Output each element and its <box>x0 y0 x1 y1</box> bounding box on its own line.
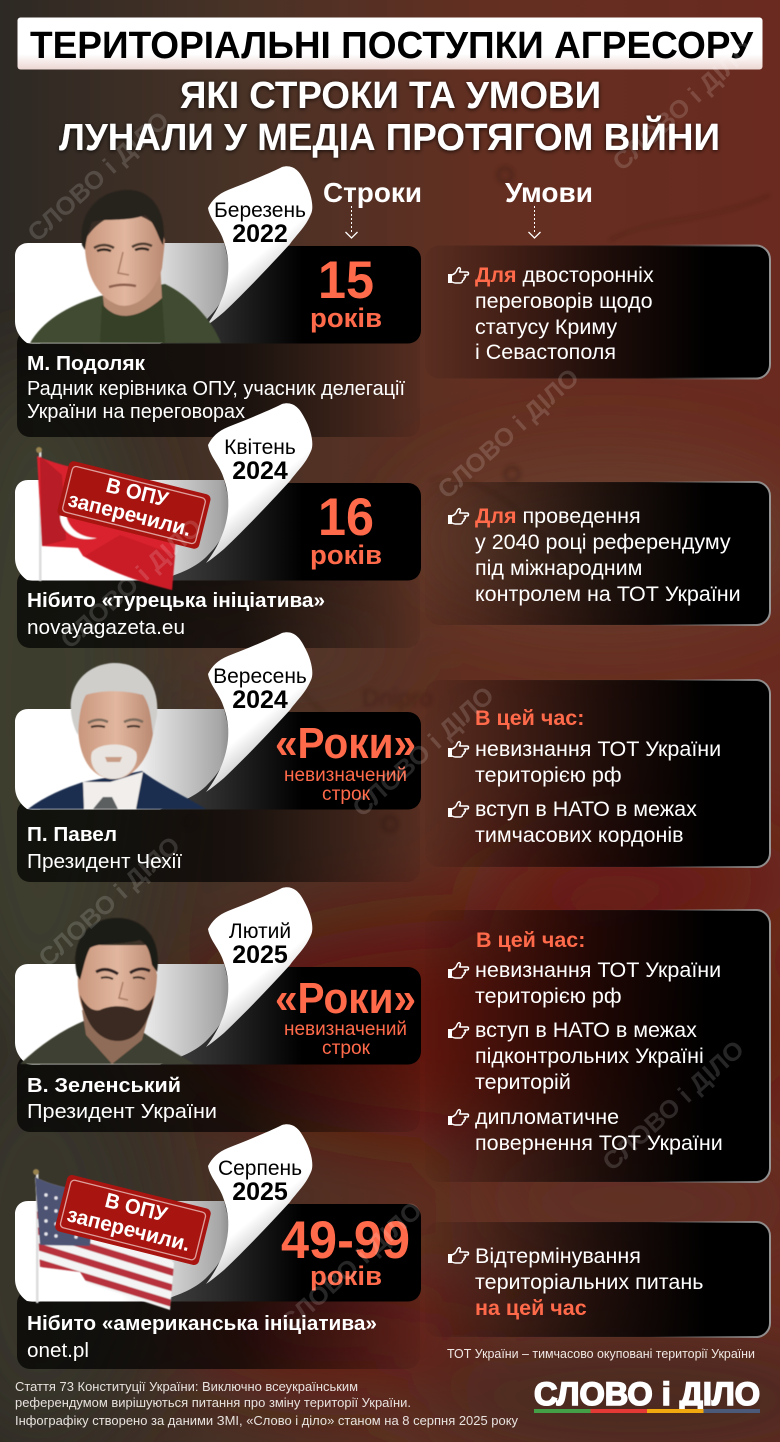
date: Березень <box>214 199 306 222</box>
flag: Turkey <box>36 447 176 590</box>
term: 16 years: років <box>310 540 382 570</box>
term: years, undefined: невизначений <box>284 1019 407 1040</box>
name and role: України на переговорах <box>27 401 245 423</box>
name and source: Нібито «турецька ініціатива» <box>27 590 325 612</box>
date: 2024 <box>232 686 288 714</box>
panel: row 3 conditions <box>425 680 770 867</box>
conditions text: територіальних питань <box>475 1270 703 1294</box>
date: 2024 <box>232 457 288 485</box>
name and role: М. Подоляк <box>27 353 146 375</box>
conditions text 2 <box>475 1018 704 1094</box>
term: years, undefined: строк <box>322 784 371 805</box>
watermarks: СЛОВО і ДІЛО <box>432 363 585 504</box>
name panel <box>17 570 420 648</box>
conditions text 1: територією рф <box>475 763 622 787</box>
panel: row 5 conditions <box>425 1222 770 1337</box>
conditions heading: В цей час: <box>475 706 584 730</box>
flag: USA <box>32 1168 174 1310</box>
date <box>213 665 307 714</box>
footnote: ТОТ України – тимчасово окуповані території України <box>447 1347 755 1361</box>
conditions text: статусу Криму <box>475 315 617 339</box>
conditions text: Відтермінування <box>475 1244 641 1268</box>
term: 49-99 years: років <box>310 1261 382 1291</box>
card with date tab and term <box>15 1124 421 1302</box>
card with date tab and term <box>15 887 421 1065</box>
date <box>214 199 306 248</box>
stamp <box>54 1174 212 1266</box>
panel: row 3 Pavel <box>15 632 421 882</box>
heading: terms column: Строки <box>323 177 422 208</box>
date: Лютий <box>229 920 291 943</box>
watermarks: СЛОВО і ДІЛО <box>55 513 208 654</box>
background: Dnipro <box>362 685 433 712</box>
stamp: В ОПУ <box>103 1189 170 1227</box>
watermarks: СЛОВО і ДІЛО <box>22 106 175 247</box>
subtitle: ЛУНАЛИ У МЕДІА ПРОТЯГОМ ВІЙНИ <box>59 114 720 159</box>
name and role <box>27 353 405 423</box>
heading: conditions column: Умови <box>505 177 593 208</box>
portrait: Zelensky <box>20 918 194 1064</box>
conditions text 3: повернення ТОТ України <box>475 1131 723 1155</box>
date <box>229 920 291 969</box>
conditions text 1 <box>475 737 721 787</box>
conditions text 1: невизнання ТОТ України <box>475 958 721 982</box>
name panel <box>17 1055 420 1132</box>
name and source: novayagazeta.eu <box>27 617 185 639</box>
conditions heading: В цей час: <box>476 928 585 952</box>
date: 2022 <box>232 220 288 248</box>
conditions text 1: невизнання ТОТ України <box>475 737 721 761</box>
name and role: Президент України <box>27 1101 217 1123</box>
conditions text 2 <box>475 797 697 847</box>
subtitle <box>59 75 720 159</box>
source notes: Стаття 73 Конституції України: Виключно всеукраїнським <box>15 1379 358 1394</box>
panel: row 1 Podolyak <box>15 166 421 437</box>
term: years, undefined <box>275 719 416 805</box>
stamp <box>56 460 212 550</box>
icon: pointing hand <box>448 742 468 757</box>
watermarks: СЛОВО і ДІЛО <box>597 1035 750 1176</box>
source notes <box>15 1379 518 1428</box>
date <box>224 436 296 485</box>
date: 2025 <box>232 941 288 969</box>
conditions text 2: вступ в НАТО в межах <box>475 1018 697 1042</box>
portrait: Podolyak <box>30 190 221 343</box>
icon: pointing hand <box>448 509 468 524</box>
source notes: референдумом вирішуються питання про зміну території України. <box>15 1395 411 1410</box>
name and source <box>27 1313 377 1362</box>
panel: row 1 conditions <box>425 246 770 378</box>
card with date tab and term <box>15 166 421 344</box>
conditions text <box>475 504 741 606</box>
conditions text 2: територій <box>475 1070 571 1094</box>
name and role: Радник керівника ОПУ, учасник делегації <box>27 378 405 400</box>
conditions text: Для двосторонніх <box>475 263 654 287</box>
conditions text 2: підконтрольних Україні <box>475 1044 704 1068</box>
conditions text 3 <box>475 1105 723 1155</box>
logo: СЛОВО і ДІЛО <box>534 1376 760 1412</box>
term: 49-99 years: 49-99 <box>281 1211 410 1270</box>
icon: pointing hand <box>448 268 468 283</box>
date: Вересень <box>213 665 307 688</box>
source notes: Інфографіку створено за даними ЗМІ, «Слово і діло» станом на 8 серпня 2025 року <box>15 1413 518 1428</box>
term: years, undefined <box>275 974 416 1059</box>
name panel <box>17 800 420 882</box>
heading: terms column <box>323 177 422 238</box>
term: 16 years <box>310 488 382 570</box>
background: Zapor <box>690 817 753 844</box>
conditions text: під міжнародним <box>475 556 642 580</box>
name and source <box>27 590 325 639</box>
card with date tab and term <box>15 632 421 810</box>
conditions text: Для проведення <box>475 504 641 528</box>
icon: pointing hand <box>448 802 468 817</box>
stamp: заперечили. <box>65 1203 192 1256</box>
date: Квітень <box>224 436 296 459</box>
panel: row 2 conditions <box>425 482 770 625</box>
panel: row 2 Turkish initiative <box>15 403 421 648</box>
conditions text: на цей час <box>475 1296 587 1320</box>
conditions text 3: дипломатичне <box>475 1105 619 1129</box>
panel: row 4 conditions <box>425 910 770 1182</box>
date: Серпень <box>218 1157 302 1180</box>
portrait: Pavel <box>28 663 206 809</box>
title: ТЕРИТОРІАЛЬНІ ПОСТУПКИ АГРЕСОРУ <box>30 25 753 67</box>
watermarks: СЛОВО і ДІЛО <box>347 681 500 822</box>
icon: pointing hand <box>448 1110 468 1125</box>
panel: row 5 American initiative <box>0 1124 421 1369</box>
conditions text 1 <box>475 958 721 1008</box>
name and role <box>27 1075 217 1123</box>
name and role: П. Павел <box>27 824 117 846</box>
term: years, undefined: невизначений <box>284 765 407 786</box>
icon: pointing hand <box>448 1023 468 1038</box>
stamp: В ОПУ <box>104 474 171 512</box>
conditions text <box>475 263 654 364</box>
term: 15 years: років <box>310 303 382 333</box>
watermarks: СЛОВО і ДІЛО <box>607 35 760 176</box>
conditions text <box>475 1244 703 1320</box>
conditions text: контролем на ТОТ України <box>475 582 741 606</box>
name panel <box>17 330 420 437</box>
stamp: заперечили. <box>66 488 193 541</box>
watermarks: СЛОВО і ДІЛО <box>275 1196 428 1337</box>
term: 15 years <box>310 251 382 333</box>
conditions text: у 2040 році референдуму <box>475 530 731 554</box>
term: years, undefined: «Роки» <box>275 719 416 768</box>
name and source: Нібито «американська ініціатива» <box>27 1313 377 1335</box>
watermarks: СЛОВО і ДІЛО <box>33 831 186 972</box>
term: 15 years: 15 <box>318 251 374 310</box>
conditions text 1: територією рф <box>475 984 622 1008</box>
icon: pointing hand <box>448 1248 468 1263</box>
date: 2025 <box>232 1178 288 1206</box>
term: years, undefined: «Роки» <box>275 974 416 1023</box>
conditions text 2: вступ в НАТО в межах <box>475 797 697 821</box>
name and source: onet.pl <box>27 1340 89 1362</box>
name panel <box>17 1290 420 1369</box>
term: 16 years: 16 <box>318 488 374 547</box>
name and role: Президент Чехії <box>27 851 182 873</box>
date <box>218 1157 302 1206</box>
term: years, undefined: строк <box>322 1038 371 1059</box>
heading: conditions column <box>505 177 593 238</box>
conditions text 2: тимчасових кордонів <box>475 823 684 847</box>
subtitle: ЯКІ СТРОКИ ТА УМОВИ <box>180 75 601 117</box>
icon: pointing hand <box>448 963 468 978</box>
conditions text: і Севастополя <box>475 340 616 364</box>
name and role <box>27 824 182 873</box>
card with date tab and term <box>15 403 421 581</box>
conditions text: переговорів щодо <box>475 289 653 313</box>
name and role: В. Зеленський <box>27 1075 181 1097</box>
panel: row 4 Zelensky <box>15 887 421 1132</box>
